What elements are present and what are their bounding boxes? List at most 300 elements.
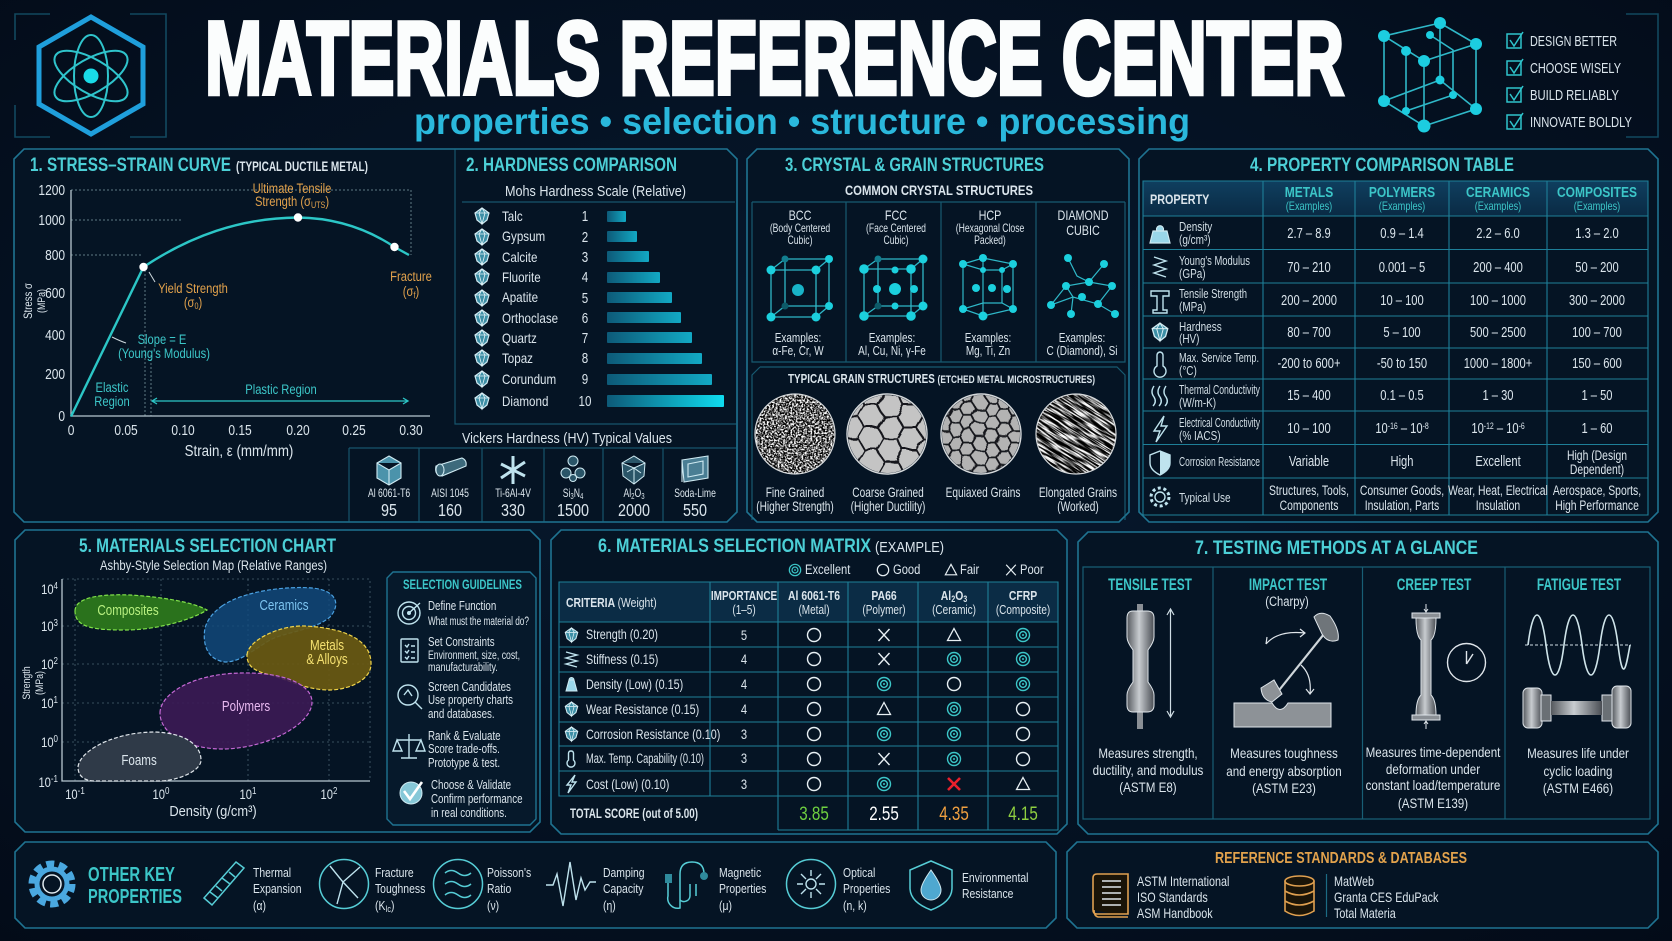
Mohs scale rows: Fluorite [502, 270, 541, 285]
test: impact: Measures toughness [1230, 746, 1338, 761]
heading: selection matrix: (EXAMPLE) [875, 539, 944, 556]
table values: 0.001 – 5 [1379, 259, 1425, 275]
panel: selection guidelines [387, 572, 536, 825]
heading: selection matrix: 6. MATERIALS SELECTION MATRIX [598, 536, 871, 557]
table values: Components [1280, 498, 1338, 513]
chart: stress-strain: 400 [45, 327, 65, 343]
property: fracture toughness: Fracture [375, 866, 414, 880]
guideline: choose and validate: Choose & Validate [431, 779, 511, 792]
Vickers values: 160 [438, 501, 462, 520]
chart: stress-strain: 0 [194, 301, 199, 311]
icon: crystal lattice [1378, 17, 1482, 132]
chart: stress-strain: Yield Strength [158, 281, 228, 296]
table values: -50 to 150 [1377, 355, 1427, 371]
table values: -12 [1484, 421, 1494, 431]
property: magnetic properties: (μ) [719, 899, 732, 913]
grain: coarse grained: Coarse Grained [852, 485, 924, 500]
table values: 10 – 100 [1287, 420, 1331, 436]
matrix header: (Metal) [798, 604, 830, 617]
chart: stress-strain: f [413, 290, 416, 300]
matrix criteria: Cost (Low) (0.10) [586, 777, 669, 792]
row labels: (GPa) [1179, 268, 1206, 281]
table values: -6 [1519, 421, 1525, 431]
header logo: atom in hexagon [15, 14, 166, 137]
crystal: HCP [956, 208, 1025, 358]
Mohs scale rows: 3 [582, 249, 588, 265]
Vickers values: 4 [580, 493, 583, 501]
guideline: define function: What must the material do? [428, 616, 529, 628]
table values: 10 – 100 [1380, 292, 1424, 308]
table header row: METALS [1285, 184, 1333, 200]
matrix criteria [565, 627, 720, 793]
table header row [1150, 184, 1637, 213]
grain: equiaxed [940, 393, 1022, 500]
table values: 500 – 2500 [1470, 324, 1526, 340]
crystal: HCP: Packed) [974, 235, 1006, 247]
matrix header: 3 [963, 594, 968, 604]
test: fatigue: FATIGUE TEST [1537, 576, 1621, 595]
test: creep: constant load/temperature [1366, 778, 1500, 793]
table values: – 10 [1398, 420, 1423, 436]
chart: stress-strain: Strength (σ [255, 194, 311, 209]
test: creep: deformation under [1386, 762, 1480, 777]
matrix importance values: 4 [741, 652, 747, 667]
row labels: (HV) [1179, 333, 1200, 346]
table values: 150 – 600 [1572, 355, 1622, 371]
sub-heading: Mohs: Mohs Hardness Scale (Relative) [505, 184, 686, 200]
matrix header: PA66 [871, 589, 897, 603]
property: fracture toughness: Toughness [375, 882, 425, 896]
test: fatigue [1523, 576, 1631, 796]
chart: stress-strain: (Young's Modulus) [118, 346, 210, 361]
chart: stress-strain: Elastic [96, 380, 128, 395]
table values: – 10 [1494, 420, 1519, 436]
matrix header: CRITERIA (Weight) [566, 596, 657, 610]
table values: Variable [1289, 453, 1329, 469]
Vickers values: 95 [381, 501, 397, 520]
property: Poisson's ratio: Ratio [487, 882, 512, 896]
test: tensile: TENSILE TEST [1108, 576, 1192, 595]
chart: stress-strain: 0.25 [342, 422, 366, 438]
guideline: rank and evaluate: Prototype & test. [428, 757, 500, 770]
guideline: choose and validate: Confirm performance [431, 793, 523, 806]
Vickers values: 3 [641, 493, 645, 501]
matrix criteria: Max. Temp. Capability (0.10) [586, 751, 704, 766]
Vickers values: AISI 1045 [431, 488, 469, 500]
property: fracture toughness [320, 860, 425, 914]
table values: 15 – 400 [1287, 387, 1331, 403]
test: impact: (ASTM E23) [1252, 781, 1316, 796]
grain: elongated: Elongated Grains [1039, 485, 1117, 500]
chart: Ashby map: Composites [97, 602, 159, 618]
chart: Ashby map: 10 [38, 775, 51, 790]
heading: other key properties [88, 864, 182, 908]
chart: stress-strain: Fracture [390, 269, 432, 284]
chart: Ashby map: Metals [310, 637, 345, 653]
guideline: set constraints: Environment, size, cost, [428, 648, 520, 662]
matrix header: (Polymer) [862, 604, 906, 617]
guideline: screen candidates [398, 681, 513, 721]
Vickers values: 2000 [618, 501, 650, 520]
Mohs scale rows: Topaz [502, 351, 533, 366]
property: optical properties [786, 860, 890, 913]
total score row: 2.55 [869, 802, 899, 824]
crystal: HCP: Mg, Ti, Zn [966, 345, 1010, 358]
chart: Ashby map: Strength [21, 666, 33, 700]
grain: fine grained: Fine Grained [766, 485, 824, 500]
test: fatigue: (ASTM E466) [1543, 781, 1613, 796]
test: tensile: Measures strength, [1098, 746, 1198, 761]
panel: other key properties [15, 842, 1056, 928]
property: optical properties: (n, k) [843, 899, 867, 913]
property: damping capacity: Damping [603, 866, 645, 880]
test: creep: (ASTM E139) [1398, 796, 1468, 811]
matrix importance values: 3 [741, 727, 747, 742]
guideline: choose and validate: in real conditions. [431, 807, 507, 820]
panel: hardness comparison [349, 149, 737, 522]
Mohs scale rows: 2 [582, 229, 588, 245]
Mohs scale rows: Quartz [502, 331, 537, 346]
crystal: FCC: Al, Cu, Ni, γ-Fe [858, 345, 926, 358]
matrix criteria: Density (Low) (0.15) [586, 677, 683, 692]
heading: selection chart: 5. MATERIALS SELECTION CHART [79, 536, 336, 557]
chart: Ashby map: 0 [165, 785, 169, 796]
heading: testing methods: 7. TESTING METHODS AT A GLANCE [1195, 538, 1478, 559]
table values: 0.1 – 0.5 [1380, 387, 1424, 403]
row labels: Thermal Conductivity [1179, 383, 1261, 397]
panel: reference standards and databases [1067, 842, 1658, 928]
guideline: screen candidates: and databases. [428, 708, 495, 721]
Vickers values: 3 [570, 493, 574, 501]
panel: property comparison table [1139, 149, 1658, 522]
property: environmental resistance: Resistance [962, 887, 1014, 901]
row labels: (MPa) [1179, 301, 1206, 314]
property: fracture toughness: (K [375, 899, 385, 913]
chart: stress-strain: Ultimate Tensile [253, 181, 331, 196]
matrix header: IMPORTANCE [711, 590, 778, 603]
guideline: rank and evaluate: Score trade-offs. [428, 743, 500, 756]
row labels: Max. Service Temp. [1179, 351, 1259, 365]
chart: Ashby map: 1 [54, 694, 58, 705]
databases list: Granta CES EduPack [1334, 890, 1439, 905]
chart: Ashby map: 10 [41, 582, 54, 597]
Mohs scale rows: Diamond [502, 394, 548, 409]
table header row: COMPOSITES [1557, 184, 1637, 200]
guideline: define function: Define Function [428, 600, 496, 613]
table values: High (Design [1567, 448, 1627, 463]
matrix header: (Ceramic) [932, 604, 976, 617]
chart: Ashby map: 10 [41, 696, 54, 711]
Mohs scale rows: Apatite [502, 290, 538, 305]
chart: stress-strain: ) [198, 295, 202, 310]
chart: stress-strain: 0.15 [228, 422, 252, 438]
table header row: POLYMERS [1369, 184, 1435, 200]
total score row: 4.35 [939, 802, 969, 824]
property: thermal expansion: Thermal [253, 866, 291, 880]
property: damping capacity: Capacity [603, 882, 644, 896]
table header row: PROPERTY [1150, 192, 1209, 207]
property: optical properties: Optical [843, 866, 875, 880]
Vickers values: O [634, 488, 641, 500]
heading: property table: 4. PROPERTY COMPARISON TABLE [1250, 155, 1514, 176]
Mohs scale rows: 6 [582, 310, 588, 326]
chart: Ashby map: 10 [153, 787, 165, 802]
chart: Ashby map: 10 [41, 619, 54, 634]
databases list: MatWeb [1334, 874, 1374, 889]
table values: 2.2 – 6.0 [1476, 225, 1520, 241]
chart: stress-strain: Slope = E [138, 332, 186, 347]
chart: Ashby map: 10 [41, 735, 54, 750]
matrix ratings [808, 628, 1030, 790]
chart: stress-strain: (σ [403, 284, 413, 299]
crystal: HCP: Examples: [965, 332, 1011, 345]
test: tensile: ductility, and modulus [1093, 763, 1203, 778]
table header row: CERAMICS [1466, 184, 1530, 200]
sub-heading: common crystal: COMMON CRYSTAL STRUCTURES [845, 182, 1033, 198]
chart: Ashby map: 0 [54, 733, 58, 744]
chart: Ashby map: Foams [121, 752, 157, 768]
matrix importance values: 4 [741, 677, 747, 692]
chart: Ashby map: Density (g/cm³) [169, 802, 257, 819]
crystal: HCP: HCP [979, 208, 1001, 223]
heading: stress-strain: (TYPICAL DUCTILE METAL) [236, 159, 368, 174]
Vickers values: 550 [683, 501, 707, 520]
chart: stress-strain: 0 [68, 422, 75, 438]
table values: Insulation [1476, 498, 1520, 513]
row labels: Corrosion Resistance [1179, 455, 1260, 469]
crystal: BCC: Examples: [775, 332, 821, 345]
crystal: FCC: (Face Centered [866, 223, 926, 235]
matrix header: 2 [951, 594, 956, 604]
legend [789, 562, 1044, 577]
matrix header: (1–5) [732, 604, 756, 617]
total score row [570, 802, 1038, 824]
table values: 0.9 – 1.4 [1380, 225, 1424, 241]
panel: crystal and grain structures [747, 149, 1131, 522]
guideline: define function [398, 600, 529, 628]
table header row: (Examples) [1574, 201, 1620, 213]
matrix importance values: 4 [741, 702, 747, 717]
table values: Dependent) [1570, 462, 1624, 477]
grain: coarse grained: (Higher Ductility) [851, 499, 925, 514]
matrix importance values: 3 [741, 751, 747, 766]
chart: stress-strain: 1000 [38, 212, 65, 228]
table values: -200 to 600+ [1278, 355, 1340, 371]
test: creep [1366, 576, 1501, 811]
crystal: diamond cubic: DIAMOND [1058, 208, 1109, 223]
Mohs scale rows: 9 [582, 371, 588, 387]
grain: elongated: (Worked) [1057, 499, 1099, 514]
table values: 80 – 700 [1287, 324, 1331, 340]
standards list [1137, 874, 1229, 921]
crystal: BCC: α-Fe, Cr, W [772, 345, 824, 358]
row labels: Density [1179, 221, 1213, 234]
table header row: (Examples) [1379, 201, 1425, 213]
chart: stress-strain: Stress σ [22, 283, 35, 319]
Mohs scale rows: Orthoclase [502, 311, 558, 326]
table values: 1000 – 1800+ [1464, 355, 1532, 371]
sub-heading: grain structures: TYPICAL GRAIN STRUCTURES (ETCHED METAL MICROSTRUCTURES) [788, 371, 1095, 386]
table values: Wear, Heat, Electrical [1448, 483, 1548, 498]
table header row: (Examples) [1475, 201, 1521, 213]
sub-heading: Vickers: Vickers Hardness (HV) Typical Values [462, 431, 672, 447]
property: Poisson's ratio: Poisson's [487, 866, 531, 880]
grain: equiaxed: Equiaxed Grains [946, 485, 1020, 500]
grain: coarse grained [846, 393, 928, 514]
header checklist: DESIGN BETTER [1530, 33, 1617, 50]
subtitle: properties • selection • structure • processing [414, 101, 1190, 142]
matrix criteria: Corrosion Resistance (0.10) [586, 727, 720, 742]
table values: 300 – 2000 [1569, 292, 1625, 308]
total score row: TOTAL SCORE (out of 5.00) [570, 806, 698, 821]
heading: other key properties: PROPERTIES [88, 886, 182, 908]
legend: Excellent [805, 562, 851, 577]
table values: Excellent [1475, 453, 1521, 469]
property: thermal expansion: (α) [253, 899, 266, 913]
panel: materials selection chart [15, 530, 540, 832]
test: fatigue: Measures life under [1527, 746, 1629, 761]
matrix header: Al 6061-T6 [788, 589, 840, 603]
row labels: (°C) [1179, 365, 1197, 378]
Vickers values: 2 [631, 493, 635, 501]
guideline: screen candidates: Use property charts [428, 694, 513, 707]
property: damping capacity [546, 862, 645, 913]
crystal: FCC: FCC [885, 208, 907, 223]
Vickers values: Al 6061-T6 [368, 488, 410, 500]
Vickers values: Al [623, 488, 631, 500]
chart: stress-strain: 0.20 [286, 422, 310, 438]
crystal: BCC: (Body Centered [770, 223, 830, 235]
chart: stress-strain: 0.30 [399, 422, 423, 438]
Vickers values: Si [563, 488, 570, 500]
Mohs scale rows: 1 [582, 208, 588, 224]
matrix criteria: Wear Resistance (0.15) [586, 702, 699, 717]
property: fracture toughness: Ic [385, 904, 391, 914]
property: environmental resistance [910, 861, 1028, 910]
icon: database [1285, 876, 1314, 916]
header checklist: BUILD RELIABLY [1530, 87, 1619, 104]
header checklist: INNOVATE BOLDLY [1530, 114, 1632, 131]
table values: 200 – 2000 [1281, 292, 1337, 308]
row labels: (% IACS) [1179, 430, 1221, 443]
chart: stress-strain: ) [325, 194, 329, 209]
property: environmental resistance: Environmental [962, 871, 1028, 885]
table values: High [1391, 453, 1413, 469]
table values: -16 [1388, 421, 1398, 431]
total score row: 4.15 [1008, 802, 1038, 824]
heading: crystal: 3. CRYSTAL & GRAIN STRUCTURES [785, 155, 1044, 176]
table values: 2.7 – 8.9 [1287, 225, 1331, 241]
Vickers values: Ti-6Al-4V [495, 488, 531, 500]
guideline: rank and evaluate: Rank & Evaluate [428, 730, 501, 743]
crystal: FCC: Cubic) [884, 235, 908, 247]
grain: fine grained: (Higher Strength) [756, 499, 834, 514]
Mohs scale rows: 10 [579, 393, 591, 409]
chart: stress-strain: 0 [58, 408, 65, 424]
matrix importance values: 5 [741, 628, 747, 643]
chart: Ashby map: 10 [240, 787, 252, 802]
heading: stress-strain: 1. STRESS–STRAIN CURVE [30, 155, 231, 176]
matrix criteria: Stiffness (0.15) [586, 652, 658, 667]
matrix importance values: 3 [741, 777, 747, 792]
crystal: HCP: (Hexagonal Close [956, 223, 1025, 235]
chart: Ashby map [21, 579, 371, 819]
matrix header: (Composite) [996, 604, 1050, 617]
crystal: FCC: Examples: [869, 332, 915, 345]
chart: Ashby map: (MPa) [34, 671, 46, 695]
panel: testing methods [1078, 532, 1658, 834]
chart: Ashby map: -1 [78, 785, 85, 796]
chart: stress-strain: (σ [184, 295, 194, 310]
crystal: BCC: BCC [789, 208, 812, 223]
Mohs scale rows [475, 208, 724, 409]
guideline: set constraints: manufacturability. [428, 661, 498, 674]
property: fracture toughness: ) [391, 899, 395, 913]
chart: stress-strain: Plastic Region [245, 382, 317, 397]
property: optical properties: Properties [843, 882, 890, 896]
table values [1269, 225, 1641, 513]
legend: Fair [960, 562, 979, 577]
property: magnetic properties: Magnetic [719, 866, 761, 880]
chart: stress-strain: 0.05 [114, 422, 138, 438]
crystal: BCC: Cubic) [788, 235, 812, 247]
guideline: set constraints: Set Constraints [428, 636, 495, 649]
heading: reference standards: REFERENCE STANDARDS & DATABASES [1215, 850, 1467, 867]
grain: fine grained [755, 394, 835, 514]
table values: 100 – 1000 [1470, 292, 1526, 308]
Vickers values: N [574, 488, 580, 500]
chart: stress-strain: 200 [45, 366, 65, 382]
Vickers values: Soda-Lime [674, 488, 716, 500]
test: creep: CREEP TEST [1397, 576, 1471, 595]
property: Poisson's ratio: (ν) [487, 899, 499, 913]
table values: Aerospace, Sports, [1553, 483, 1641, 498]
chart: Ashby map: 10 [41, 657, 54, 672]
Vickers values [368, 456, 716, 520]
header checklist [1507, 14, 1658, 137]
chart: Ashby map: 2 [54, 655, 58, 666]
row labels: (W/m-K) [1179, 397, 1216, 410]
property: Poisson's ratio [434, 860, 531, 913]
heading: other key properties: OTHER KEY [88, 864, 175, 886]
matrix header: Al [941, 589, 951, 603]
property: thermal expansion [204, 862, 302, 913]
Mohs scale rows: 4 [582, 269, 588, 285]
chart: stress-strain: Region [94, 394, 130, 409]
crystal: diamond cubic [1047, 208, 1119, 358]
matrix header: CFRP [1009, 589, 1037, 603]
chart: Ashby map: Polymers [222, 698, 271, 714]
databases list: Total Materia [1334, 906, 1396, 921]
chart: stress-strain [22, 181, 432, 460]
standards list: ASTM International [1137, 874, 1229, 889]
grain: elongated [1021, 379, 1131, 514]
table values: -8 [1423, 421, 1429, 431]
guideline: screen candidates: Screen Candidates [428, 681, 511, 694]
chart: Ashby map: -1 [51, 773, 58, 784]
row labels: Typical Use [1179, 492, 1231, 505]
chart: stress-strain: 1200 [38, 182, 65, 198]
table values: Insulation, Parts [1365, 498, 1439, 513]
chart: stress-strain: 600 [45, 285, 65, 301]
crystal: BCC [766, 208, 833, 358]
panel: materials selection matrix [551, 530, 1067, 834]
standards list: ASM Handbook [1137, 906, 1213, 921]
chart: stress-strain: (MPa) [36, 289, 48, 313]
Mohs scale rows: 8 [582, 350, 588, 366]
chart: Ashby map: 10 [321, 787, 333, 802]
crystal: diamond cubic: C (Diamond), Si [1047, 345, 1117, 358]
